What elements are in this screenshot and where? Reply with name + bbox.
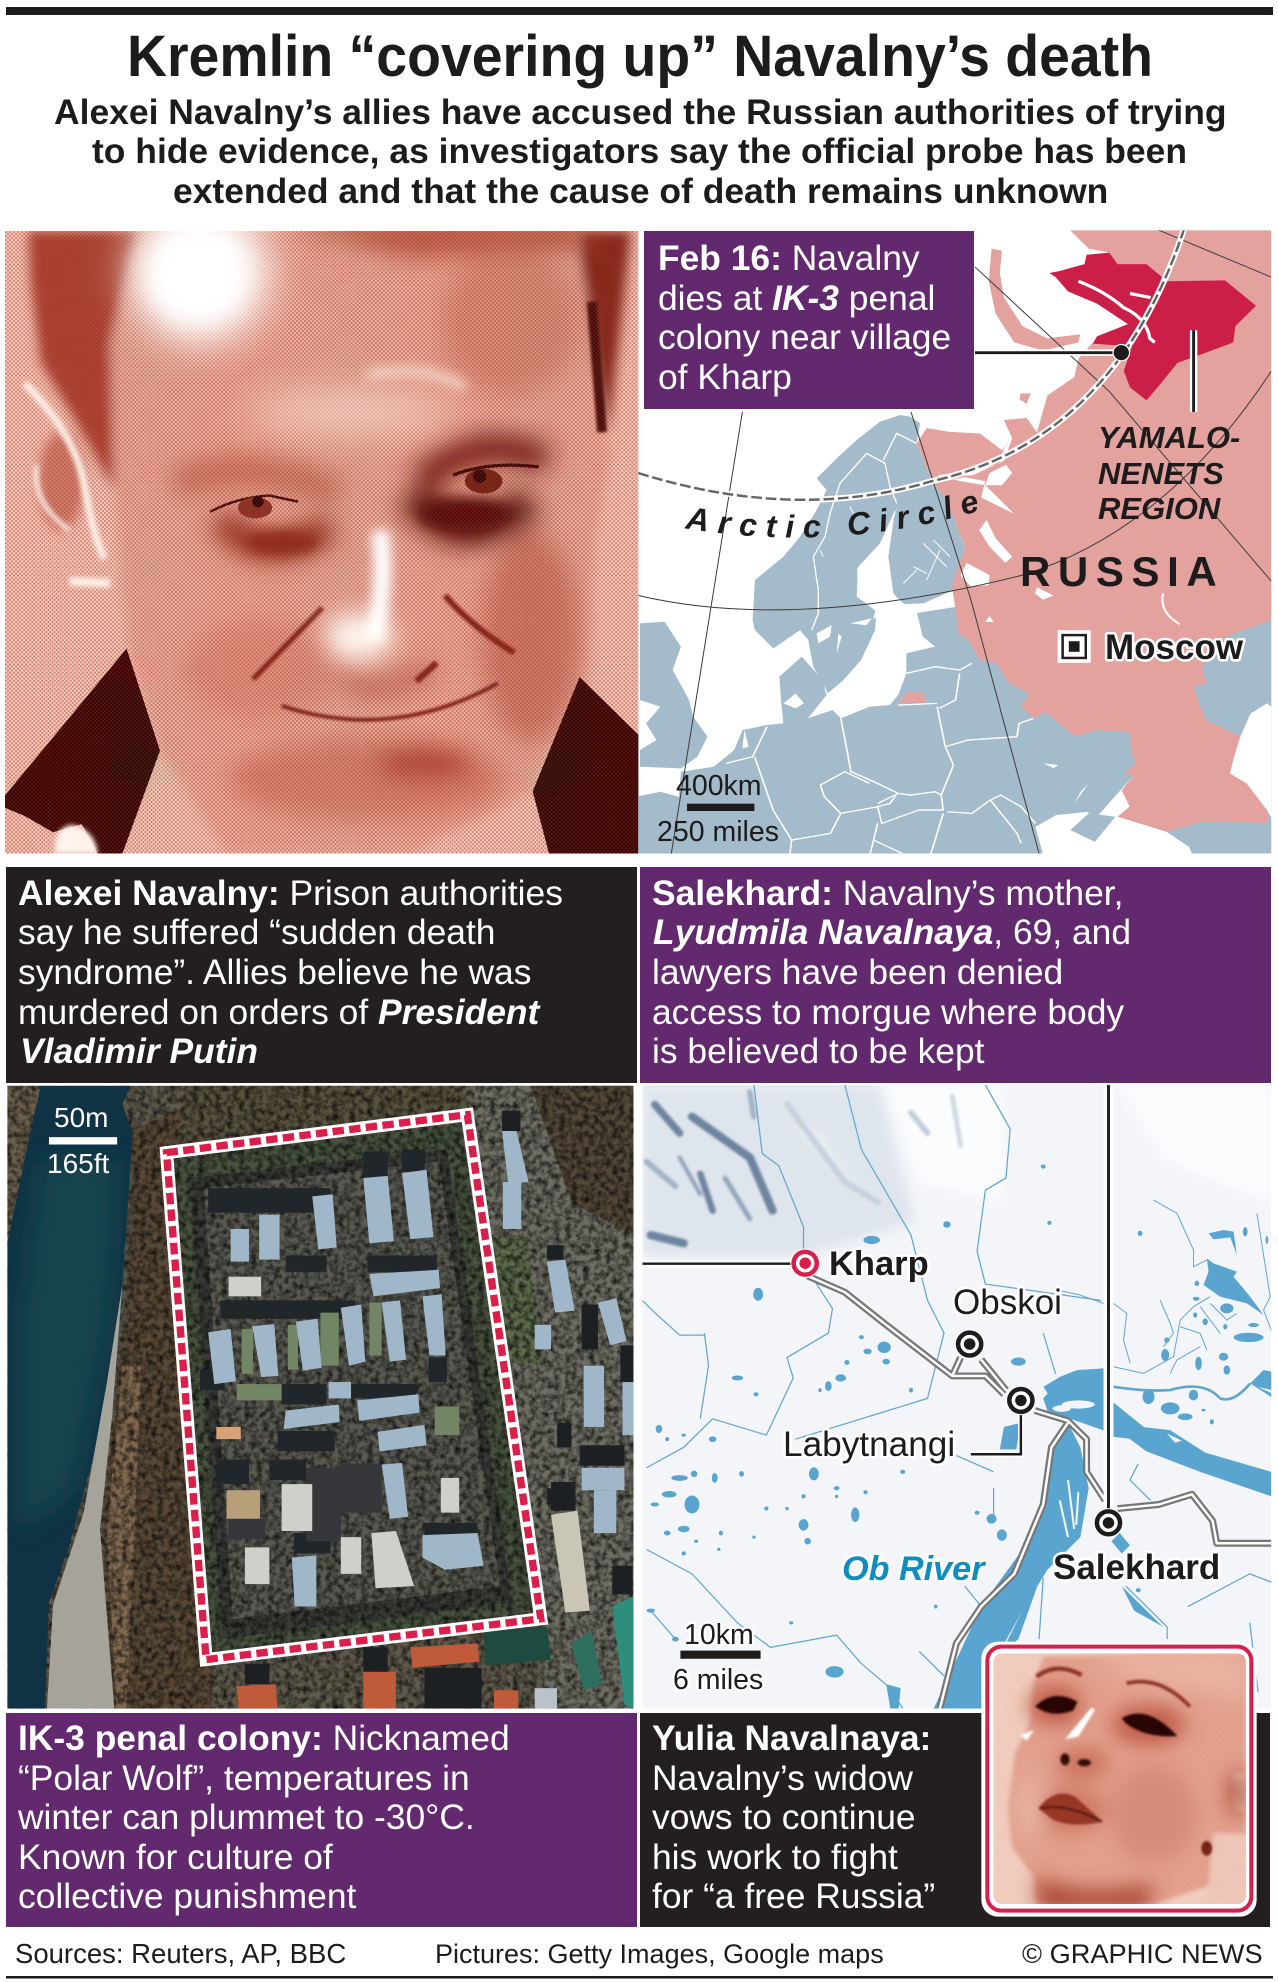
panel: Yulia Navalnaya: Yulia Navalnaya: [652, 1718, 931, 1758]
scale bar [49, 1137, 117, 1144]
lakes [647, 1164, 1141, 1678]
Ob River [886, 1402, 1271, 1709]
panel: Feb 16 callout [644, 231, 974, 409]
panel: IK-3 penal colony: collective punishment [18, 1876, 357, 1916]
leader lines [642, 1085, 1108, 1519]
seas and lakes [938, 438, 1275, 857]
panel: Alexei Navalny [6, 867, 637, 1083]
roads [808, 1276, 1271, 1709]
subtitle: Alexei Navalny’s allies have accused the Russian authorities of trying [54, 92, 1226, 132]
borders and inland detail [640, 663, 1115, 857]
panel: Salekhard [640, 867, 1271, 1083]
footer: picture credits: Pictures: Getty Images, Google maps [435, 1939, 884, 1969]
inset highlights [1020, 1707, 1095, 1741]
label: Yamalo-Nenets region: YAMALO- [1098, 420, 1240, 455]
panel: Salekhard: Salekhard: [652, 873, 833, 913]
label: Yamalo-Nenets region: NENETS [1098, 456, 1224, 491]
label: satellite scale: 165ft [47, 1148, 109, 1179]
panel: Feb 16 callout: dies at [658, 278, 772, 318]
scale bar [687, 804, 754, 811]
label: Salekhard: Salekhard [1053, 1548, 1220, 1587]
footer: copyright: © GRAPHIC NEWS [1022, 1938, 1263, 1969]
photo: Yulia Navalnaya portrait [981, 1642, 1257, 1917]
panel: Alexei Navalny: Prison authorities [280, 873, 563, 913]
prison compound [175, 1125, 535, 1656]
label: Labytnangi: Labytnangi [783, 1425, 955, 1464]
panel: Yulia Navalnaya: vows to continue [652, 1797, 916, 1837]
marker: Kharp [790, 1249, 820, 1278]
photo highlights [131, 204, 457, 428]
panel: Salekhard: lawyers have been denied [652, 952, 1063, 992]
NE Ob channel [1043, 1368, 1105, 1431]
photo: Alexei Navalny portrait [5, 204, 640, 853]
callout lines [975, 330, 1194, 412]
subtitle: to hide evidence, as investigators say the official probe has been [92, 131, 1187, 171]
continental Europe [636, 573, 1278, 857]
panel: Salekhard: is believed to be kept [652, 1031, 985, 1071]
map: Europe and Russia locator [638, 230, 1272, 854]
label: Russia: RUSSIA [1020, 548, 1224, 595]
top rule [6, 7, 1273, 15]
label: Arctic Circle: Arctic Circle [684, 495, 978, 538]
panel: Salekhard: access to morgue where body [652, 992, 1124, 1032]
marker: Salekhard [1094, 1508, 1123, 1538]
terrain shading [647, 1092, 961, 1243]
panel: Alexei Navalny: syndrome”. Allies believe he was [18, 952, 531, 992]
panel: Alexei Navalny: murdered on orders of [18, 992, 378, 1032]
panel: Feb 16 callout: colony near village [658, 317, 951, 357]
Gulf of Bothnia [857, 507, 905, 618]
perimeter dashed outline [167, 1115, 541, 1660]
marker: Obskoi [955, 1329, 985, 1359]
label: map scale: 10km [684, 1619, 754, 1651]
label: satellite scale: 50m [54, 1102, 108, 1133]
label: Kharp: Kharp [829, 1245, 929, 1283]
panel: Yulia Navalnaya: his work to fight [652, 1837, 898, 1877]
panel: IK-3 penal colony [6, 1713, 637, 1927]
panel: Alexei Navalny: Alexei Navalny: [18, 873, 280, 913]
label: map scale: 6 miles [673, 1664, 763, 1696]
label: Ob River: Ob River [842, 1550, 986, 1588]
Ob delta and eastern wetlands [1043, 1200, 1272, 1460]
panel: Yulia Navalnaya [640, 1713, 1270, 1927]
Yamalo-Nenets region [1049, 253, 1256, 400]
panel: Salekhard: , 69, and [993, 912, 1131, 952]
bottom rule [6, 1976, 1273, 1978]
graticule lines [638, 230, 1271, 853]
panel: Feb 16 callout: IK-3 penal [772, 278, 935, 318]
panel: IK-3 penal colony: “Polar Wolf”, temperatures in [18, 1758, 470, 1798]
panel: Alexei Navalny: say he suffered “sudden death [18, 912, 495, 952]
Scandinavia and Finland [753, 415, 965, 693]
panel: Alexei Navalny: Vladimir Putin [20, 1031, 258, 1071]
panel: Yulia Navalnaya: for “a free Russia” [652, 1876, 935, 1916]
panel: IK-3 penal colony: winter can plummet to -30°C. [17, 1797, 475, 1837]
panel: Feb 16 callout: Navalny [782, 238, 920, 278]
panel: Salekhard: Lyudmila Navalnaya [653, 912, 993, 952]
title: Kremlin “covering up” Navalny’s death [127, 24, 1153, 89]
panel: Alexei Navalny: President [378, 992, 540, 1032]
footer: sources: Sources: Reuters, AP, BBC [15, 1938, 346, 1969]
panel: IK-3 penal colony: IK-3 penal colony: [18, 1718, 323, 1758]
panel: IK-3 penal colony: Nicknamed [323, 1718, 510, 1758]
label: map scale: 250 miles [657, 816, 779, 848]
marker: Labytnangi [1006, 1386, 1036, 1415]
map: Kharp to Salekhard area [642, 1085, 1272, 1709]
scale bar [680, 1651, 761, 1659]
label: Moscow: Moscow [1105, 628, 1244, 667]
rivers [642, 1085, 1271, 1709]
panel: Feb 16 callout: Feb 16: [658, 238, 782, 278]
Russia land mass [917, 230, 1271, 832]
satellite image: IK-3 penal colony [7, 1086, 635, 1709]
surroundings buildings [502, 1130, 635, 1533]
panel: Yulia Navalnaya: Navalny’s widow [652, 1758, 913, 1798]
label: Yamalo-Nenets region: REGION [1098, 491, 1221, 526]
panel: Salekhard: Navalny’s mother, [833, 873, 1123, 913]
label: Obskoi: Obskoi [953, 1283, 1062, 1322]
panel: Feb 16 callout: of Kharp [658, 357, 792, 397]
subtitle: extended and that the cause of death remains unknown [173, 171, 1108, 211]
Arctic Circle dashed line [638, 230, 1184, 500]
label: map scale: 400km [676, 770, 762, 802]
Moscow marker [1058, 630, 1091, 663]
panel: IK-3 penal colony: Known for culture of [18, 1837, 333, 1877]
